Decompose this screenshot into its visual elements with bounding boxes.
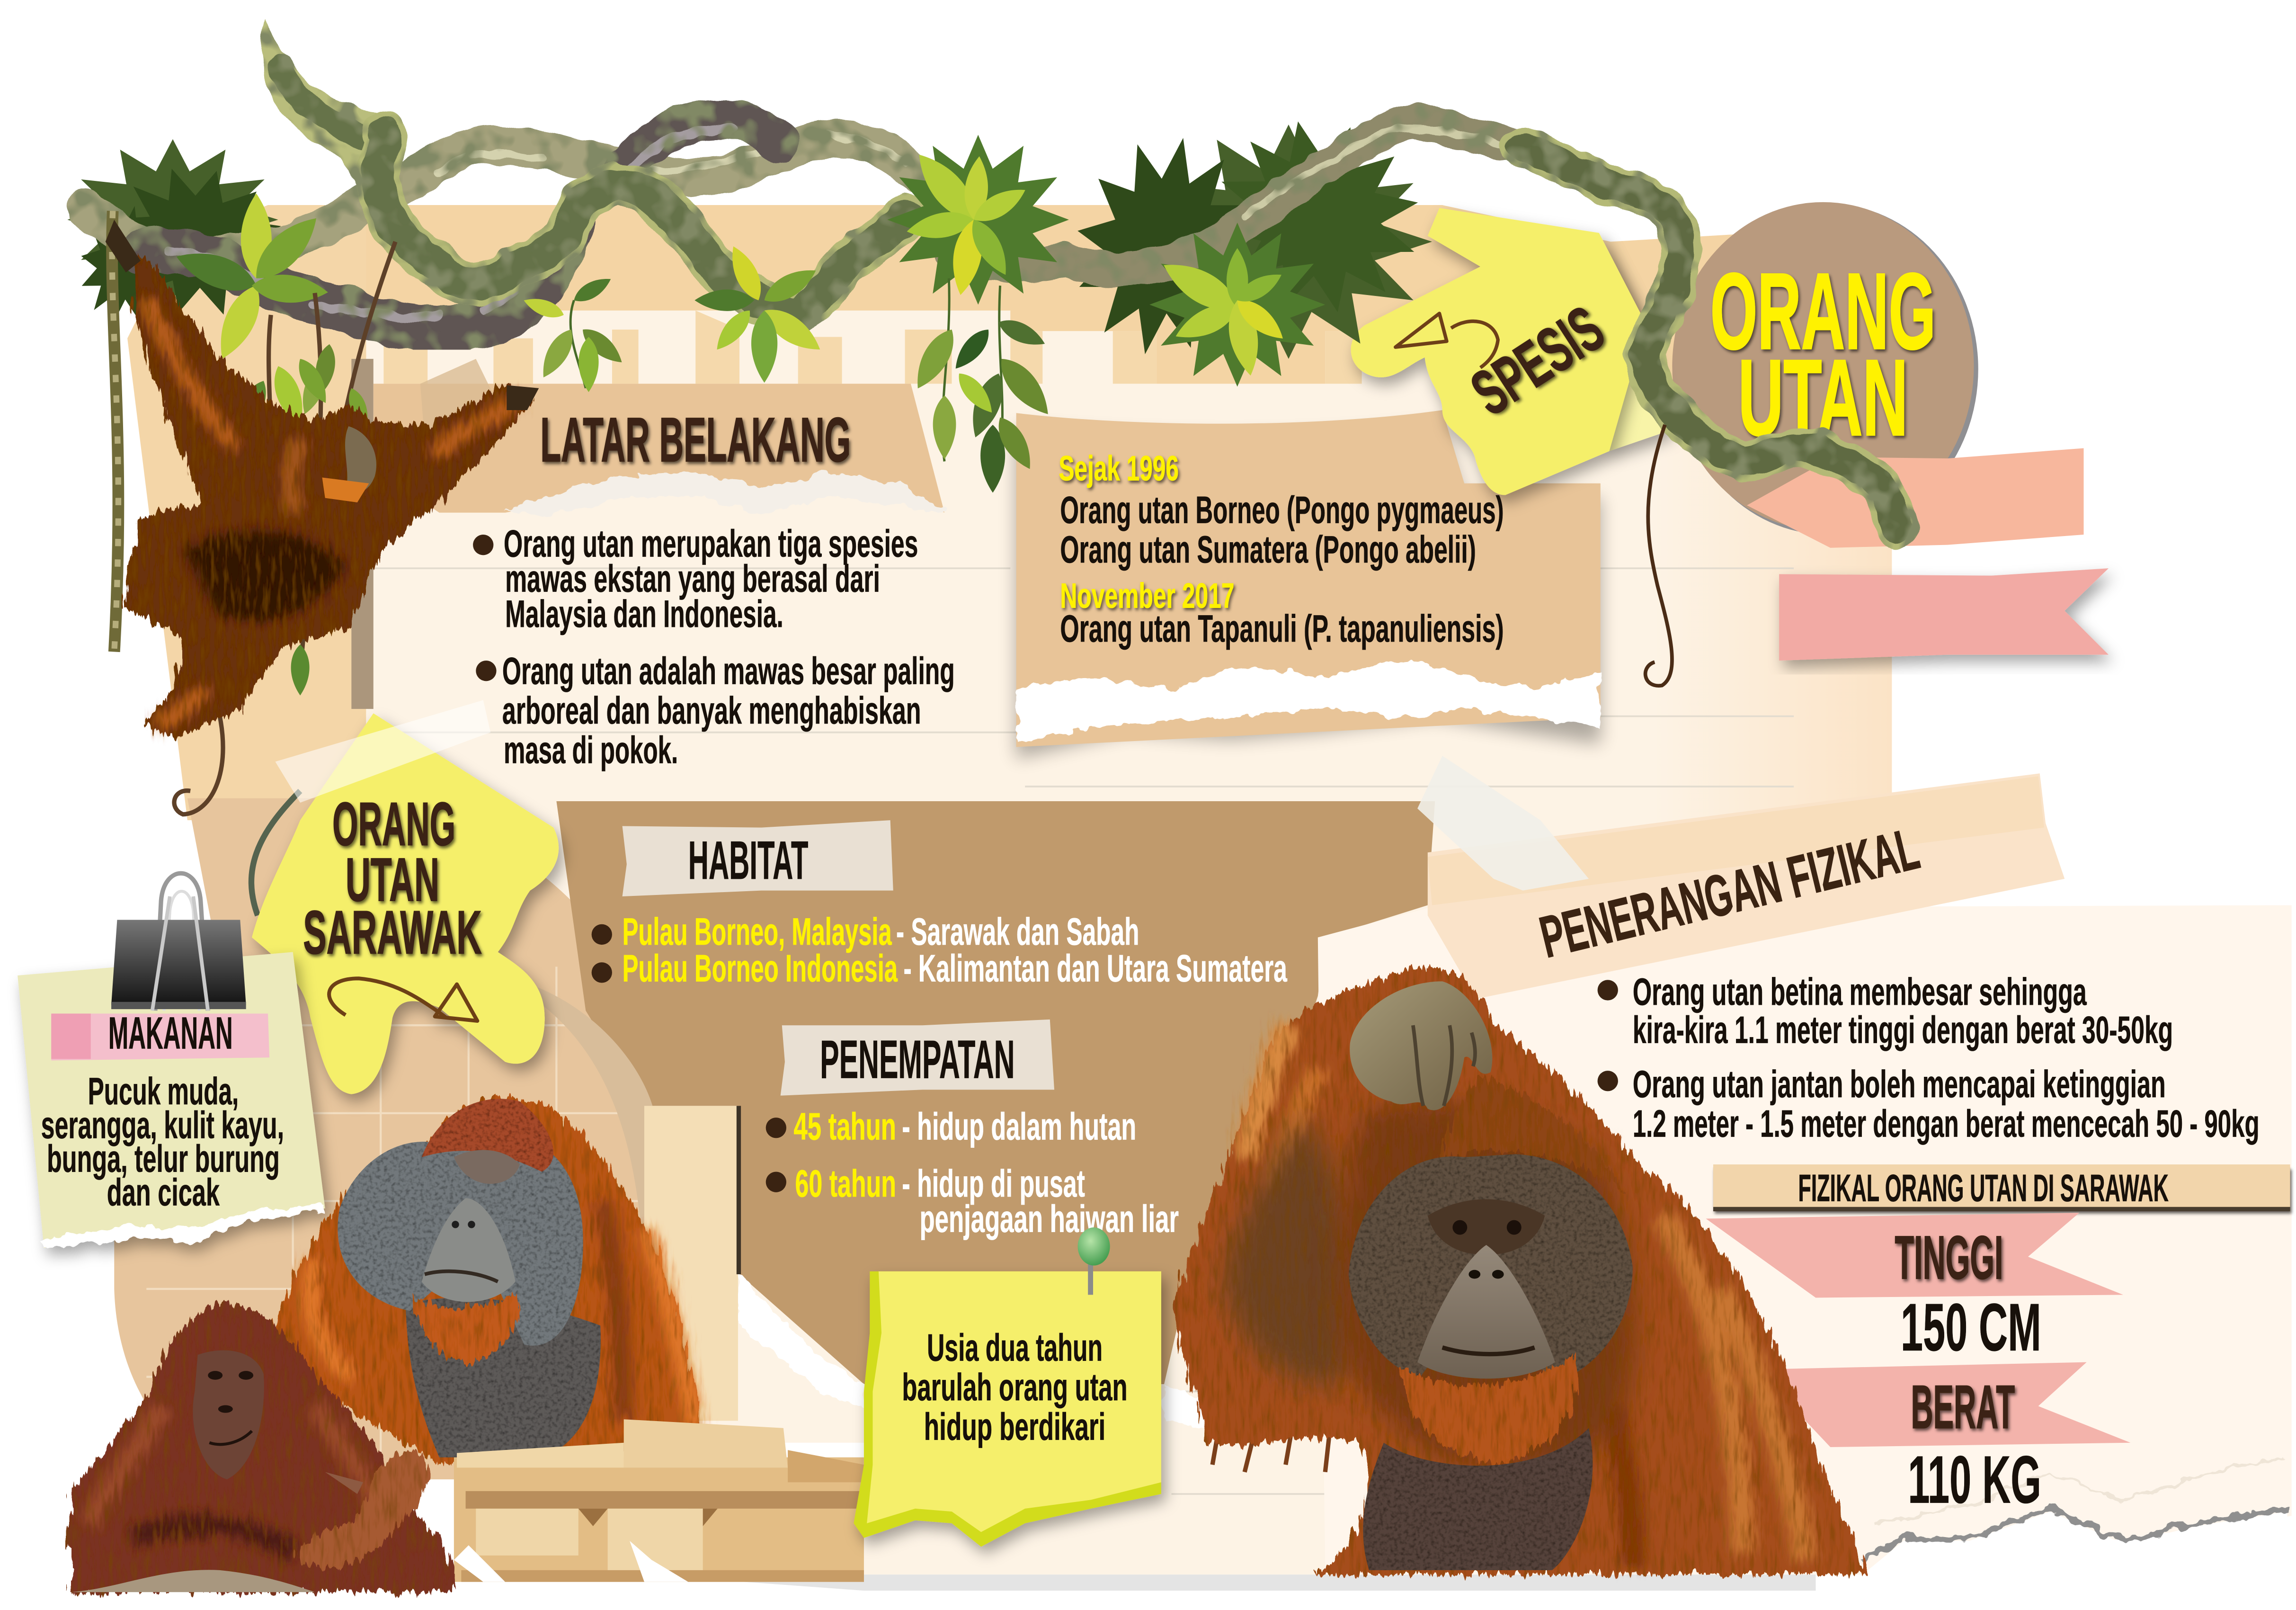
panel: spesis yellow tab [1351, 208, 1669, 495]
text block: makanan: MAKANAN [108, 1008, 233, 1059]
text block: habitat [592, 911, 1288, 990]
face [345, 426, 376, 493]
panel: spesis box: Orang utan Sumatera (Pongo abelii) [1060, 528, 1476, 571]
ribbon: berat: BERAT [1911, 1372, 2015, 1441]
sarawak title: ORANG [332, 789, 455, 859]
icon: green pin [1078, 1227, 1110, 1295]
ribbon: tinggi: TINGGI [1895, 1223, 2003, 1292]
heading text: LATAR BELAKANG [540, 405, 851, 475]
sarawak title: UTAN [346, 845, 439, 914]
panel: brown block [530, 801, 1435, 1421]
arrow [329, 978, 477, 1021]
note: usia dua tahun: hidup berdikari [924, 1406, 1105, 1449]
tape: penerangan fizikal [1417, 756, 2065, 999]
ground [70, 1570, 315, 1592]
leaves: left cluster [171, 193, 395, 696]
species text: Sejak 1996 [1059, 449, 1179, 488]
text block: penempatan: - hidup dalam hutan [902, 1105, 1136, 1148]
mother's face [193, 1351, 264, 1479]
baby [296, 1452, 430, 1568]
panel: fizikal panel [1318, 905, 2292, 1589]
eyes area [1428, 1199, 1545, 1254]
text block: makanan: Pucuk muda, [88, 1070, 239, 1113]
label: habitat [623, 820, 893, 896]
hair over head [1442, 1076, 1625, 1194]
text block: latar belakang bullets: masa di pokok. [504, 729, 678, 772]
torn white scrap [1164, 1388, 1362, 1435]
leaves: hanging centre [907, 278, 1058, 493]
muzzle [422, 1198, 516, 1302]
text block: penempatan: - hidup di pusat [902, 1163, 1085, 1205]
text block: latar belakang bullets: arboreal dan banyak menghabiskan [502, 689, 921, 732]
tendril: right curl [1646, 425, 1672, 686]
leaves: foliage cluster centre [887, 135, 1069, 304]
stat: 150 cm: 150 CM [1901, 1290, 2041, 1365]
text block: latar belakang bullets: Orang utan merupakan tiga spesies [504, 522, 918, 565]
label: penempatan: PENEMPATAN [820, 1029, 1015, 1090]
heading: PENERANGAN FIZIKAL [1534, 816, 1925, 970]
sarawak title: SARAWAK [303, 898, 482, 967]
text block: latar belakang bullets: mawas ekstan yang berasal dari [505, 558, 880, 600]
arrow [1396, 313, 1498, 367]
muzzle [1417, 1245, 1555, 1378]
text block: latar belakang bullets: Malaysia dan Indonesia. [505, 593, 783, 635]
ribbon: salmon [1747, 448, 2083, 548]
stat: 110 kg: 110 KG [1908, 1442, 2041, 1518]
hair wisps [1212, 1406, 1333, 1472]
text block: latar belakang bullets [473, 522, 955, 772]
tendril: left curl [174, 703, 223, 814]
chest skin [1363, 1428, 1593, 1570]
beard [413, 1292, 517, 1365]
title: Orang Utan [1710, 250, 1936, 458]
leaves: foliage cluster right [1149, 223, 1325, 387]
vine: main green [261, 18, 907, 313]
orangutan: large thinking [1175, 967, 1867, 1574]
lower left grid panel [114, 798, 644, 1479]
orangutan: mother and baby [70, 1304, 454, 1592]
panel: spesis box: November 2017 [1060, 576, 1234, 616]
neck pouch [406, 1297, 601, 1458]
text block: habitat: - Sarawak dan Sabah [896, 911, 1139, 953]
text block: makanan: bunga, telur burung [47, 1138, 280, 1181]
leaves: dark foliage left [67, 139, 302, 335]
torn white edge [739, 1271, 864, 1409]
icon: binder clip [111, 873, 246, 1011]
tan columns [383, 311, 1362, 384]
ribbon: pink [1779, 568, 2109, 661]
orangutan: flanged male [264, 1097, 706, 1465]
text block: makanan: dan cicak [107, 1172, 220, 1214]
leaves: mid vine [521, 242, 827, 392]
panel: makanan note [18, 952, 325, 1251]
text block: latar belakang bullets: Orang utan adalah mawas besar paling [502, 650, 955, 693]
leaves: dark foliage right [1059, 92, 1447, 369]
label [51, 1013, 269, 1060]
panel: paper background [114, 205, 1892, 1591]
text block: penempatan: 45 tahun [793, 1105, 896, 1148]
tan top band [268, 205, 1735, 384]
panel: title circle [1672, 202, 1978, 535]
torn edge [44, 1204, 325, 1251]
wood pallet [454, 1419, 864, 1582]
tan left strip [127, 205, 366, 820]
text block: fizikal bullets [1598, 971, 2260, 1145]
note: usia dua tahun [854, 1271, 1161, 1547]
beard [1398, 1351, 1578, 1465]
text block: habitat: Pulau Borneo Indonesia [623, 947, 898, 990]
tape: over sarawak tab [276, 700, 490, 803]
note: usia dua tahun: barulah orang utan [902, 1366, 1128, 1409]
orangutan: hanging [106, 211, 539, 740]
panel: latar belakang heading [374, 359, 944, 516]
vines: background grey-olive [85, 120, 914, 329]
forehead [422, 1099, 553, 1172]
torn bottom [1862, 1512, 2287, 1589]
hand [1350, 981, 1492, 1110]
torn white edge [1016, 659, 1601, 744]
cheek flanges [338, 1135, 583, 1346]
text block: habitat: - Kalimantan dan Utara Sumatera [903, 947, 1288, 990]
text block: penempatan: 60 tahun [795, 1163, 896, 1205]
text block: makanan: serangga, kulit kayu, [41, 1104, 284, 1146]
label: penempatan [781, 1020, 1054, 1096]
label: habitat: HABITAT [688, 830, 808, 891]
spesis label: SPESIS [1459, 292, 1616, 429]
fur silhouette [1175, 967, 1867, 1574]
panel: spesis box: Orang utan Tapanuli (P. tapanuliensis) [1060, 608, 1504, 650]
panel: spesis box: Orang utan Borneo (Pongo pygmaeus) [1060, 489, 1504, 531]
title: Orang Utan: UTAN [1738, 337, 1908, 458]
text block: penempatan [766, 1105, 1179, 1240]
cheek flanges [1349, 1154, 1633, 1384]
note: usia dua tahun: Usia dua tahun [927, 1327, 1103, 1369]
hand on vine [106, 220, 141, 272]
sarawak title [303, 789, 482, 967]
fur body [123, 252, 536, 740]
panel: spesis box [1016, 410, 1601, 759]
title: Orang Utan: ORANG [1710, 250, 1936, 372]
panel: orang utan sarawak tab [252, 713, 559, 1094]
vine: right side [952, 120, 1898, 529]
text block: makanan [41, 1008, 284, 1214]
ribbon: tinggi [1706, 1213, 2123, 1298]
text block: penempatan: penjagaan haiwan liar [919, 1198, 1179, 1240]
vine stick [112, 211, 118, 652]
text block: habitat: Pulau Borneo, Malaysia [623, 911, 892, 953]
ribbon: berat [1757, 1362, 2130, 1447]
